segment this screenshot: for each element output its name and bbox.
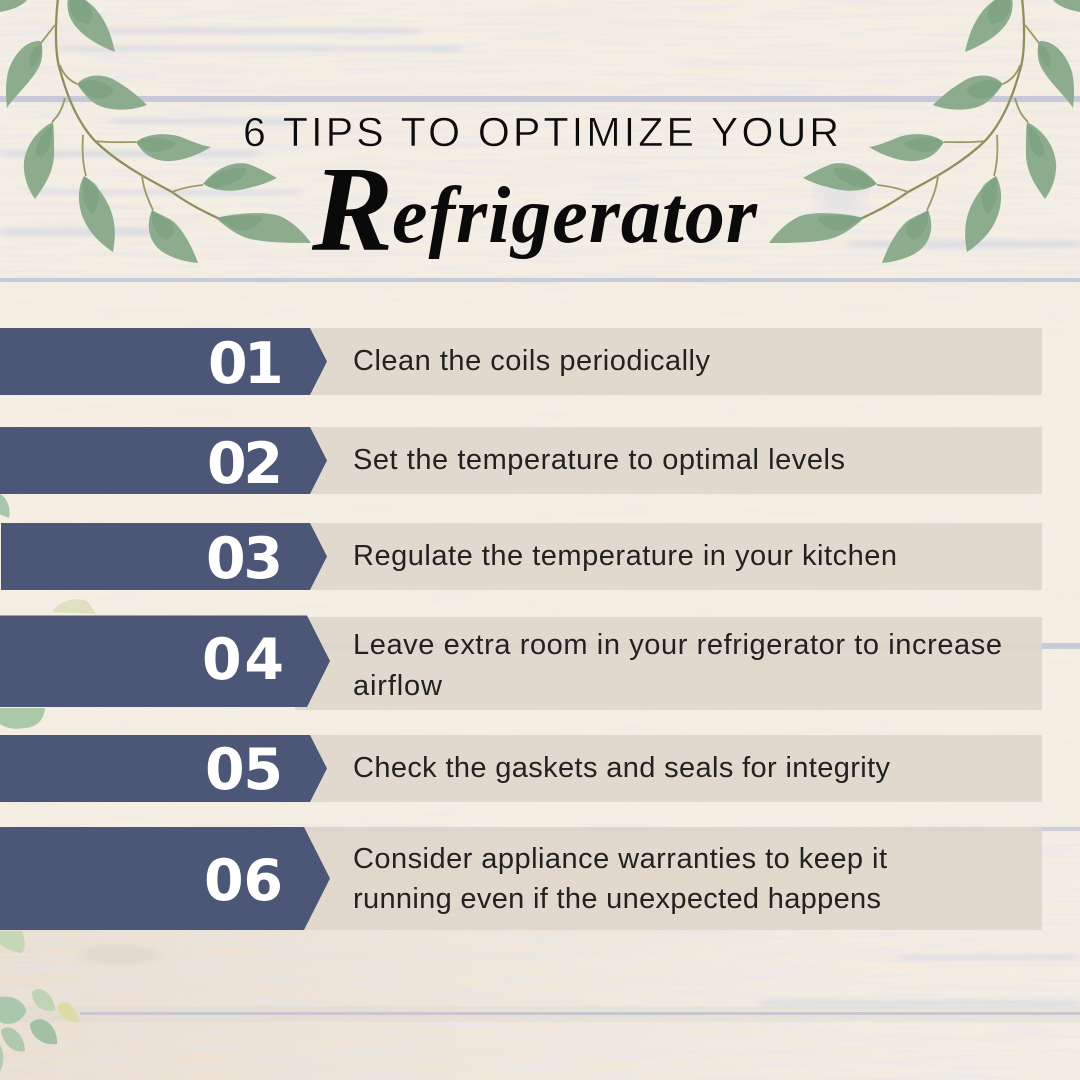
tip 2 text bar (300, 427, 1042, 494)
tip 5 number: 05 (205, 737, 283, 803)
tip 6 (0, 827, 1042, 930)
tip 1 number: 01 (208, 331, 284, 397)
tip 4 number: 04 (202, 627, 284, 693)
tip 6 text bar (295, 827, 1042, 930)
title: refrigerator script (311, 142, 758, 277)
tip 3 text: Regulate the temperature in your kitchen (353, 540, 897, 572)
tip 1 text: Clean the coils periodically (353, 345, 710, 377)
tip 4 text line 2: airflow (353, 670, 443, 702)
tip 1 arrow (0, 328, 327, 395)
tip 5 text: Check the gaskets and seals for integrity (353, 752, 890, 784)
tip 4 text: Leave extra room in your refrigerator to increase (353, 629, 1002, 661)
plank gaps (0, 96, 1080, 102)
tip 1 text bar (300, 328, 1042, 395)
tip 1 (0, 328, 1042, 397)
tip 6 text line 2: running even if the unexpected happens (353, 883, 881, 915)
tip 3 arrow (1, 523, 327, 590)
tip 2 (0, 427, 1042, 497)
tip 3 text bar (300, 523, 1042, 590)
tip 2 arrow (0, 427, 327, 494)
tip 2 number: 02 (207, 431, 283, 497)
tip 6 text: Consider appliance warranties to keep it (353, 843, 887, 875)
title: refrigerator script: R (311, 142, 393, 277)
tip 5 arrow (0, 735, 327, 802)
tip 3 number: 03 (206, 526, 283, 592)
title: refrigerator script: efrigerator (392, 172, 758, 260)
tip 4 text bar (295, 617, 1042, 710)
tip 5 (0, 735, 1042, 803)
tip 6 number: 06 (204, 848, 283, 914)
tip 2 text: Set the temperature to optimal levels (353, 444, 845, 476)
tip 5 text bar (300, 735, 1042, 802)
title: 6 tips to optimize your: 6 TIPS TO OPTIMIZE YOUR (243, 109, 839, 155)
leaf garland: right (769, 0, 1080, 263)
tip 4 (0, 616, 1042, 710)
leaf garland: left (0, 0, 311, 263)
tip 3 (1, 523, 1042, 592)
tip 4 arrow (0, 616, 330, 707)
tip 6 arrow (0, 827, 330, 930)
faded leaves on left edge (0, 494, 96, 1072)
